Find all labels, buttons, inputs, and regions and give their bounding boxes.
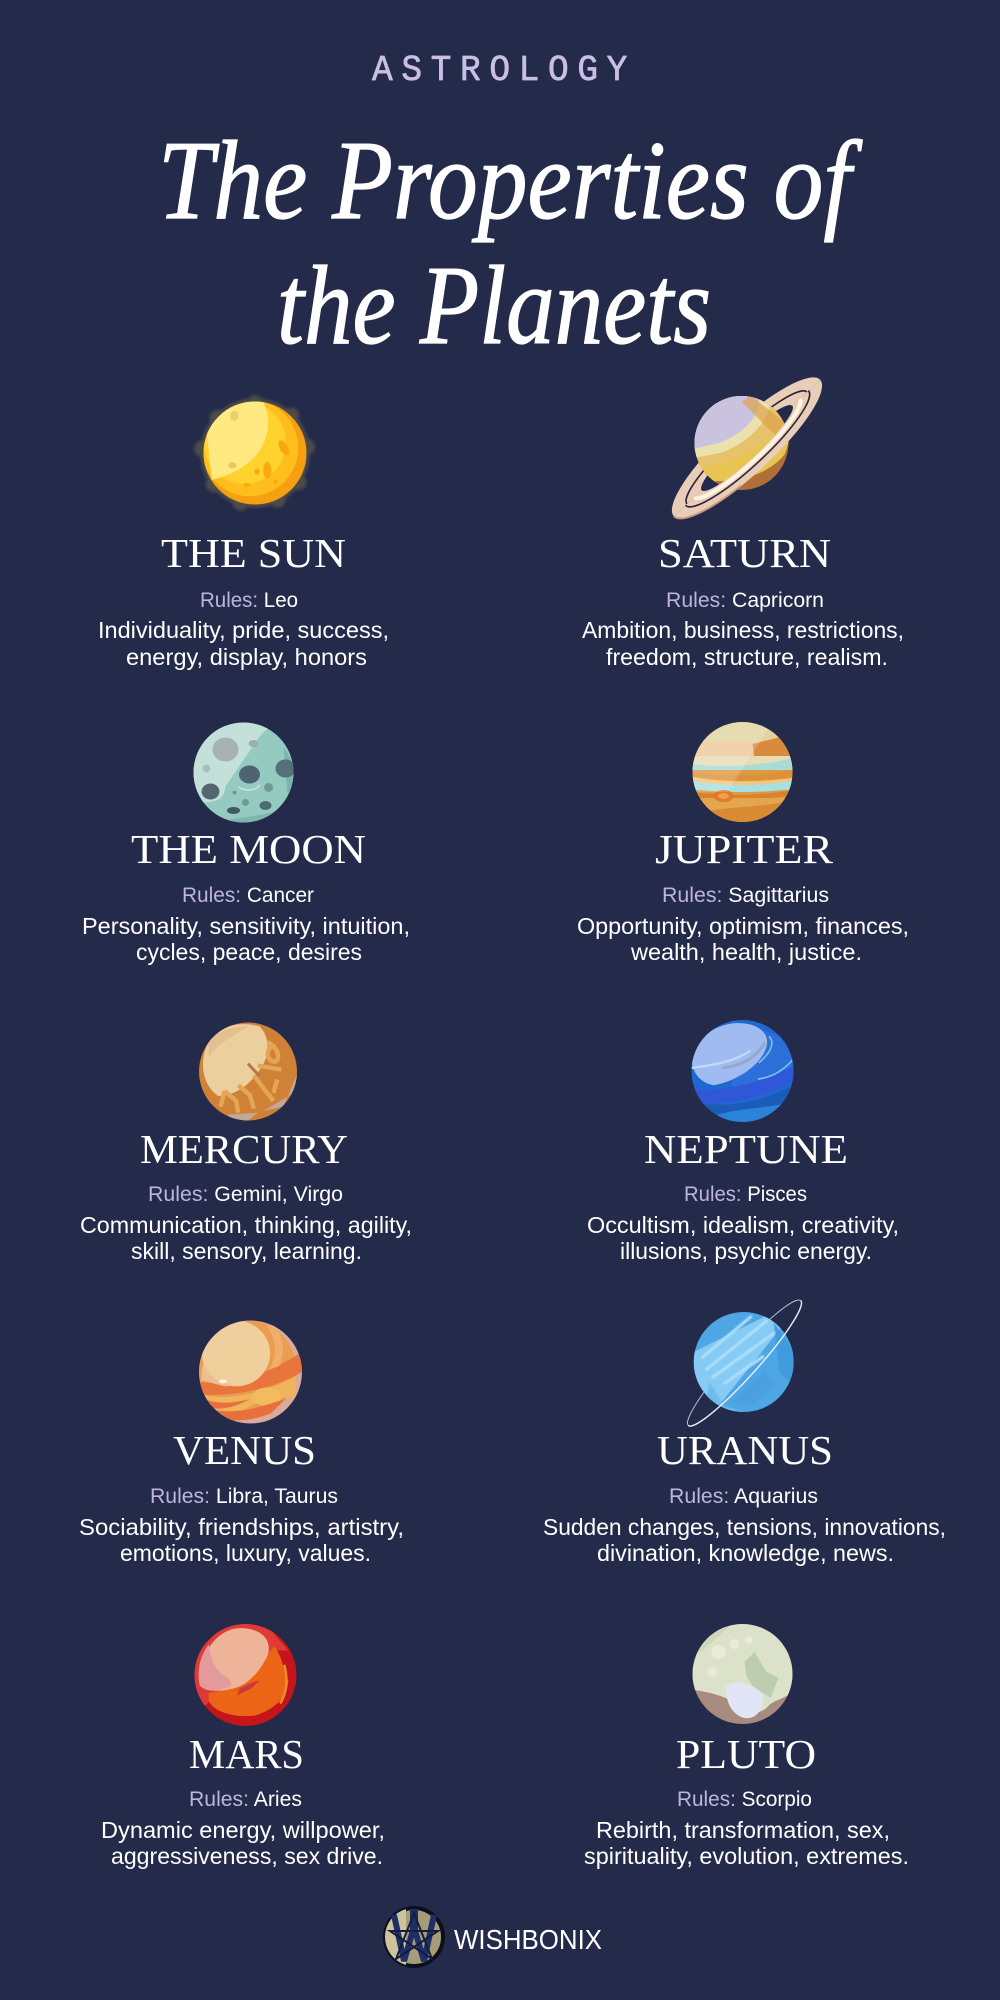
- icon: sun: [194, 395, 315, 511]
- description: wealth, health, justice.: [630, 939, 862, 965]
- description: emotions, luxury, values.: [120, 1540, 371, 1566]
- icon: uranus: [686, 1300, 802, 1427]
- description: [79, 1514, 404, 1566]
- description: [582, 617, 904, 670]
- panel: pluto: [584, 1624, 909, 1869]
- panel: neptune: [587, 1020, 899, 1264]
- rules: Rules: Leo: [200, 589, 298, 612]
- description: spirituality, evolution, extremes.: [584, 1843, 909, 1869]
- heading: MERCURY: [140, 1126, 348, 1172]
- icon: neptune: [692, 1020, 794, 1122]
- panel: jupiter: [577, 722, 909, 965]
- title: The Properties of: [158, 119, 863, 243]
- rules: Rules: Aquarius: [669, 1485, 818, 1508]
- title: the Planets: [277, 244, 711, 368]
- icon: venus: [199, 1320, 302, 1424]
- panel: uranus: [543, 1292, 946, 1566]
- panel: saturn: [582, 362, 904, 670]
- heading: VENUS: [173, 1427, 316, 1473]
- rules: Rules: Cancer: [182, 884, 314, 907]
- heading: PLUTO: [676, 1731, 816, 1777]
- icon: saturn: [672, 377, 822, 520]
- logo: wishbonix: [385, 1908, 602, 1966]
- description: Opportunity, optimism, finances,: [577, 913, 909, 939]
- heading: MARS: [189, 1731, 304, 1777]
- icon: moon: [194, 722, 296, 822]
- description: [101, 1817, 385, 1869]
- description: divination, knowledge, news.: [597, 1540, 894, 1566]
- description: Ambition, business, restrictions,: [582, 617, 904, 643]
- icon: pluto: [692, 1624, 792, 1724]
- description: [543, 1514, 946, 1566]
- description: Rebirth, transformation, sex,: [596, 1817, 890, 1843]
- eyebrow: astrology: ASTROLOGY: [372, 50, 636, 91]
- description: [587, 1212, 899, 1264]
- rules: Rules: Gemini, Virgo: [148, 1183, 343, 1206]
- description: [577, 913, 909, 965]
- panel: venus: [79, 1320, 404, 1566]
- panel: the moon: [82, 722, 410, 965]
- description: illusions, psychic energy.: [620, 1238, 872, 1264]
- panel: mars: [101, 1624, 385, 1869]
- description: [584, 1817, 909, 1869]
- description: Individuality, pride, success,: [98, 617, 389, 643]
- description: energy, display, honors: [126, 644, 367, 670]
- rules: Rules: Capricorn: [666, 589, 824, 612]
- icon: jupiter: [692, 722, 792, 822]
- heading: THE SUN: [161, 530, 346, 576]
- rules: Rules: Aries: [189, 1788, 302, 1811]
- description: [98, 617, 389, 670]
- panel: the sun: [98, 395, 389, 670]
- description: cycles, peace, desires: [136, 939, 362, 965]
- rules: Rules: Libra, Taurus: [150, 1485, 338, 1508]
- icon: wishbone emblem: [385, 1908, 443, 1966]
- description: Sociability, friendships, artistry,: [79, 1514, 404, 1540]
- title: [158, 119, 863, 368]
- description: [82, 913, 410, 965]
- heading: JUPITER: [655, 826, 834, 872]
- rules: Rules: Sagittarius: [662, 884, 829, 907]
- description: Sudden changes, tensions, innovations,: [543, 1514, 946, 1540]
- heading: SATURN: [658, 530, 831, 576]
- description: aggressiveness, sex drive.: [111, 1843, 383, 1869]
- wordmark: WISHBONIX: [454, 1924, 602, 1955]
- heading: NEPTUNE: [644, 1126, 848, 1172]
- description: [80, 1212, 412, 1264]
- rules: Rules: Scorpio: [677, 1788, 812, 1811]
- heading: THE MOON: [131, 826, 366, 872]
- description: Personality, sensitivity, intuition,: [82, 913, 410, 939]
- panel: mercury: [80, 1022, 412, 1264]
- heading: URANUS: [657, 1427, 833, 1473]
- description: Communication, thinking, agility,: [80, 1212, 412, 1238]
- description: freedom, structure, realism.: [606, 644, 888, 670]
- icon: mercury: [199, 1022, 297, 1120]
- description: skill, sensory, learning.: [131, 1238, 362, 1264]
- description: Dynamic energy, willpower,: [101, 1817, 385, 1843]
- description: Occultism, idealism, creativity,: [587, 1212, 899, 1238]
- icon: mars: [194, 1624, 296, 1726]
- rules: Rules: Pisces: [684, 1183, 807, 1206]
